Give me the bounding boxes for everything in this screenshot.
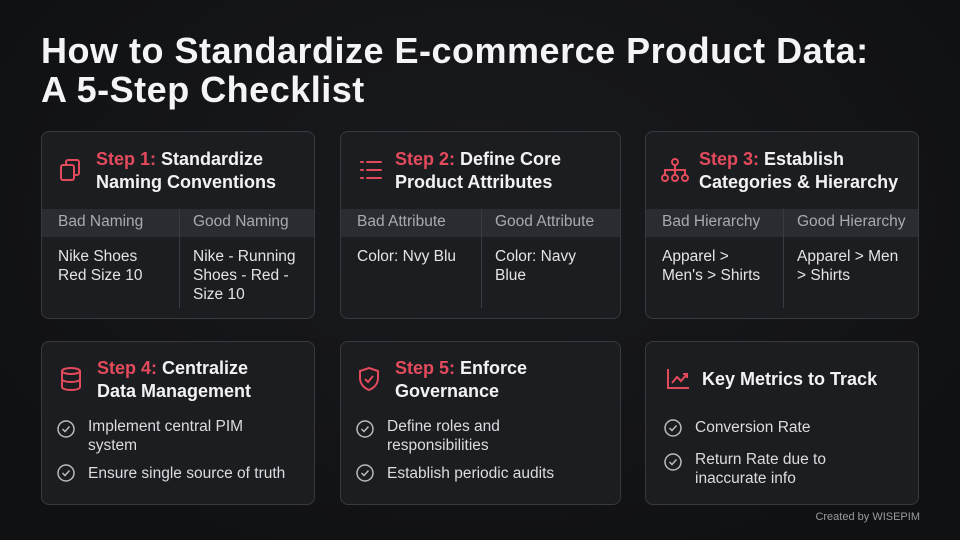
item 2 bbox=[664, 451, 826, 487]
panel: key metrics: inaccurate info bbox=[695, 470, 796, 487]
panel: step 4: Ensure single source of truth bbox=[88, 465, 285, 482]
table body: Red Size 10 bbox=[58, 267, 142, 284]
table header: Bad Naming bbox=[58, 213, 143, 230]
table body: Blue bbox=[495, 267, 526, 284]
title: A 5-Step Checklist bbox=[41, 69, 365, 110]
title bbox=[41, 30, 869, 110]
heading: Product Attributes bbox=[395, 172, 552, 192]
table body: Nike Shoes bbox=[58, 248, 137, 265]
table body bbox=[58, 248, 296, 303]
table body: Color: Navy bbox=[495, 248, 576, 265]
table body: Size 10 bbox=[193, 286, 245, 303]
item 1 bbox=[664, 419, 810, 437]
table header: Good Hierarchy bbox=[797, 213, 906, 230]
table header: Good Naming bbox=[193, 213, 289, 230]
panel: key metrics bbox=[645, 341, 919, 505]
table header bbox=[646, 209, 918, 237]
heading: Data Management bbox=[97, 381, 251, 401]
icon: list bbox=[360, 161, 382, 179]
item 2 bbox=[57, 464, 285, 482]
heading: Key Metrics to Track bbox=[702, 369, 877, 389]
icon: hierarchy bbox=[661, 158, 689, 182]
heading bbox=[395, 358, 527, 401]
panel: key metrics: Return Rate due to bbox=[695, 451, 826, 468]
heading: Categories & Hierarchy bbox=[699, 172, 898, 192]
item 1 bbox=[57, 418, 243, 454]
table body: Shoes - Red - bbox=[193, 267, 289, 284]
panel: step 3 bbox=[645, 131, 919, 319]
panel: key metrics: Conversion Rate bbox=[695, 419, 810, 436]
heading: Governance bbox=[395, 381, 499, 401]
icon: shield bbox=[359, 367, 379, 392]
item 2 bbox=[356, 464, 554, 482]
panel: step 1 bbox=[41, 131, 315, 319]
icon: copy bbox=[60, 159, 80, 181]
panel: step 5 bbox=[340, 341, 621, 505]
heading bbox=[395, 149, 561, 192]
table header bbox=[42, 209, 314, 237]
table header bbox=[341, 209, 620, 237]
panel: step 4 bbox=[41, 341, 315, 505]
table body bbox=[662, 248, 898, 284]
table body bbox=[357, 248, 576, 284]
icon: database bbox=[61, 367, 81, 391]
heading: Step 1: Standardize bbox=[96, 149, 263, 169]
icon: chart bbox=[667, 369, 689, 389]
panel: step 5: responsibilities bbox=[387, 437, 489, 454]
heading: Step 5: Enforce bbox=[395, 358, 527, 378]
title: How to Standardize E-commerce Product Data: bbox=[41, 30, 869, 71]
table header: Good Attribute bbox=[495, 213, 594, 230]
panel: step 2 bbox=[340, 131, 621, 319]
table body: Apparel > Men bbox=[797, 248, 898, 265]
table body: Men's > Shirts bbox=[662, 267, 760, 284]
table header: Bad Hierarchy bbox=[662, 213, 760, 230]
table body: > Shirts bbox=[797, 267, 850, 284]
panel: step 4: Implement central PIM bbox=[88, 418, 243, 435]
table header: Bad Attribute bbox=[357, 213, 446, 230]
credit: Created by WISEPIM bbox=[815, 511, 920, 523]
panel: step 4: system bbox=[88, 437, 137, 454]
heading bbox=[699, 149, 898, 192]
table body: Color: Nvy Blu bbox=[357, 248, 456, 265]
heading bbox=[96, 149, 276, 192]
panel: step 5: Define roles and bbox=[387, 418, 500, 435]
panel: step 5: Establish periodic audits bbox=[387, 465, 554, 482]
table body: Apparel > bbox=[662, 248, 729, 265]
heading bbox=[97, 358, 251, 401]
table body: Nike - Running bbox=[193, 248, 296, 265]
item 1 bbox=[356, 418, 500, 454]
heading: Step 2: Define Core bbox=[395, 149, 561, 169]
heading: Naming Conventions bbox=[96, 172, 276, 192]
heading: Step 3: Establish bbox=[699, 149, 844, 169]
heading: Step 4: Centralize bbox=[97, 358, 248, 378]
